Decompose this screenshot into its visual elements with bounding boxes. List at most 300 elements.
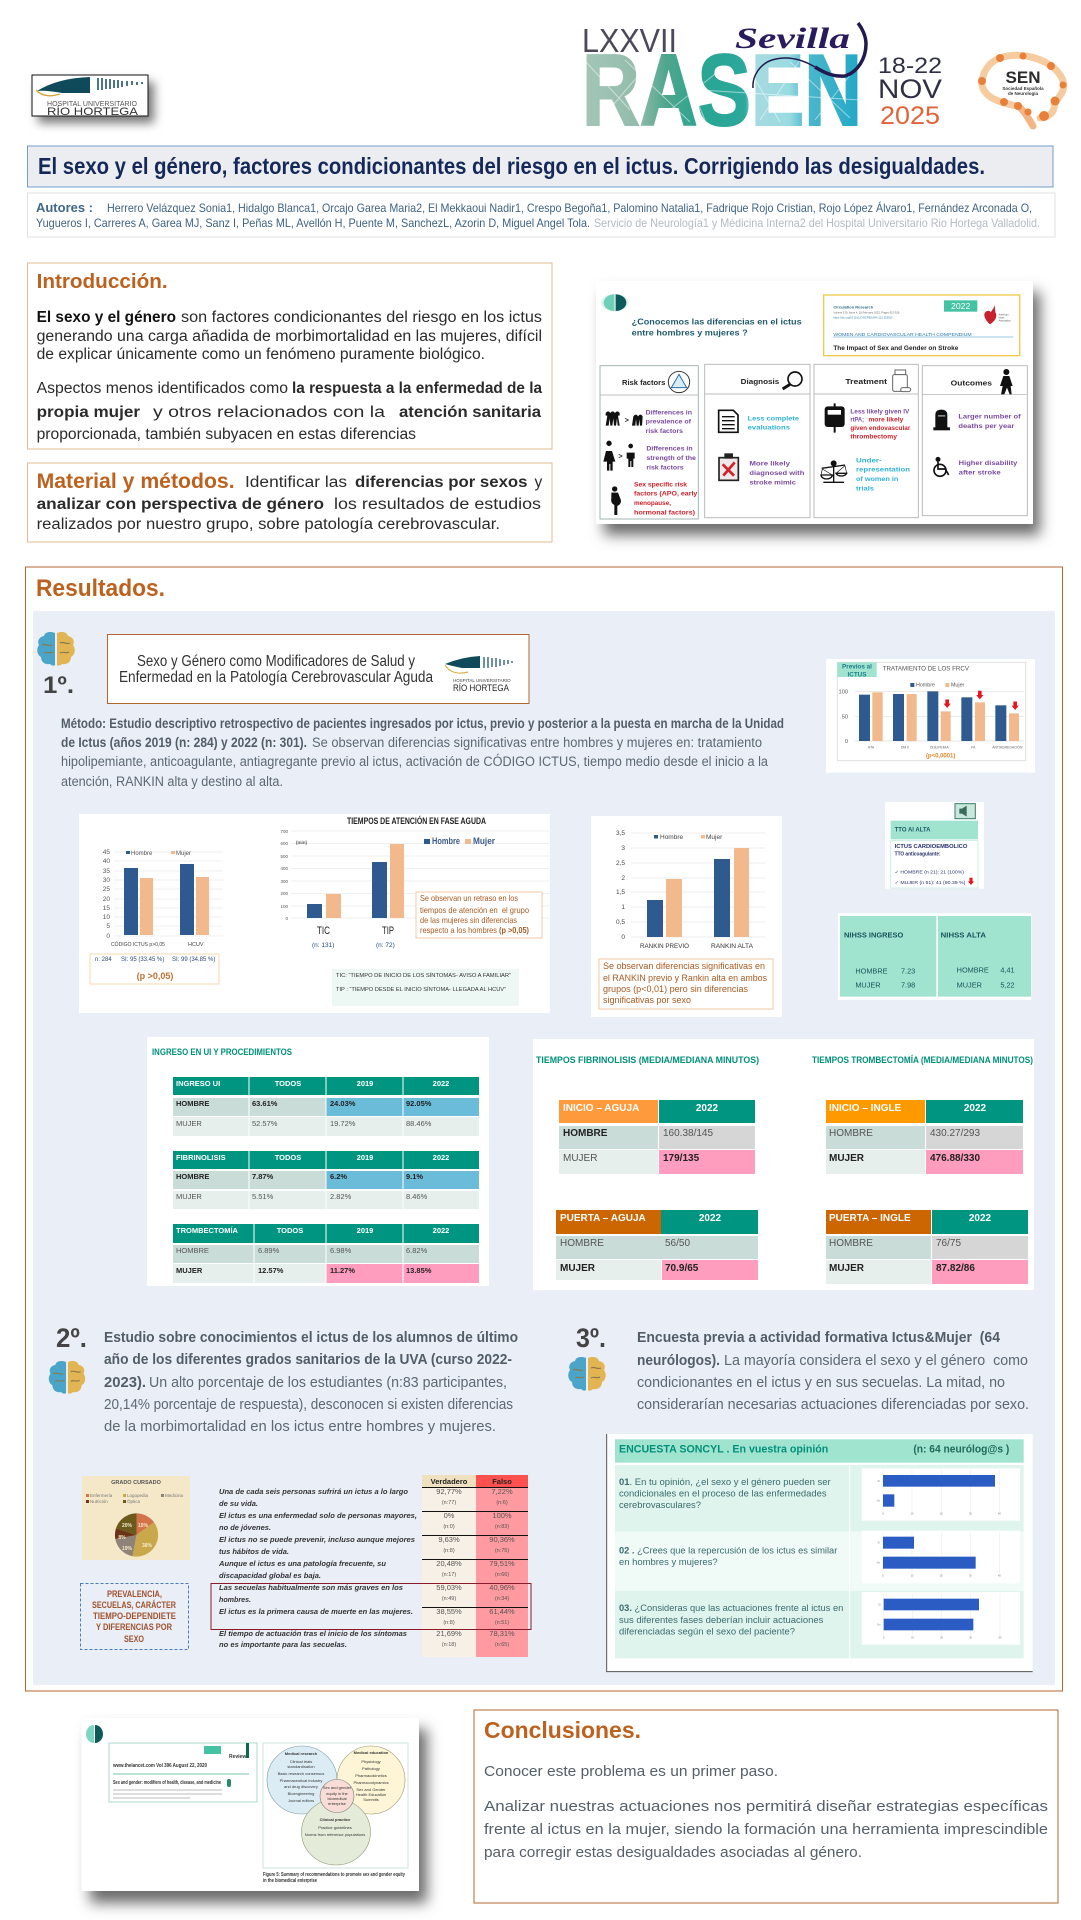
chart: tiempos de atención en fase aguda: TIC [317,925,330,937]
chart: grado cursado pie: 19% [122,1546,133,1552]
venn diagram: equity in the [326,1791,349,1796]
text block: método estudio 1: hipolipemiante, anticoagulante, antiagregante previo al ictus, activación de CÓDIGO ICTUS, tiempo medio desde el inicio a la [61,754,768,769]
questions: discapacidad global es baja. [219,1571,321,1580]
text block: introducción: son factores condicionantes del riesgo en los ictus [181,309,542,326]
table: fibrinolisis [173,1151,479,1209]
panel: chart rankin: RANKIN ALTA [711,943,754,950]
column: outcomes: Outcomes [951,381,992,388]
chart: tiempos de atención en fase aguda: 700 [280,829,288,834]
text block: estudio 2: Estudio sobre conocimientos el ictus de los alumnos de último [104,1330,518,1346]
question 2 [619,1545,837,1567]
lancet reference box [109,1743,257,1802]
chart: respuestas bars: No [877,1622,881,1626]
chart: código ictus [90,849,223,984]
panel: encuesta SONCYL: ENCUESTA SONCYL . En vuestra opinión [619,1444,828,1456]
article reference box [824,295,1020,356]
question 3: diferenciadas según el sexo del paciente? [619,1626,795,1636]
icon: pregnant woman [611,486,621,515]
text block: material y métodos: Identificar las [245,474,347,491]
table: inicio ingle [826,1100,1023,1174]
venn diagram [263,1743,408,1884]
logo: SEN [978,52,1066,126]
panel: ingreso en UI y procedimientos: INGRESO EN UI Y PROCEDIMIENTOS [152,1047,292,1058]
table: inicio aguja: 2022 [696,1103,719,1114]
chart: código ictus: 10 [103,914,110,921]
venn diagram: Sex and gender [323,1785,352,1790]
question 2: en hombres y mujeres? [619,1557,718,1567]
icon: magnifier [783,372,802,389]
text block: conclusiones: Analizar nuestras actuaciones nos permitirá diseñar estrategias específicas [484,1798,1048,1815]
chart: código ictus: 5 [106,923,110,930]
panel: chart rankin: 0 [621,934,625,941]
chart: respuestas bars: 30 [969,1511,972,1515]
chart: grado cursado pie [82,1476,190,1560]
column: treatment: given endovascular [850,425,911,432]
chart: código ictus: 30 [103,877,110,884]
chart: código ictus: 20 [103,896,110,903]
table: trombectomía: HOMBRE [176,1246,209,1255]
study 1 header [37,632,529,704]
chart: grado cursado pie: 15% [138,1523,149,1529]
panel: chart rankin: 0,5 [616,919,625,926]
questions: de su vida. [219,1499,258,1508]
figure: Lancet sex and gender [82,1718,427,1903]
values: 7,22% [491,1487,513,1496]
question 2: 02 . ¿Crees que la repercusión de los ictus es similar [619,1545,837,1555]
values: 0% [444,1511,455,1520]
column: risk factors: Differences in [646,409,692,416]
panel: NIHSS: 4,41 [1000,966,1015,975]
chart: código ictus: 25 [103,886,110,893]
text block: introducción: de explicar únicamente como un fenómeno puramente biológico. [37,346,485,363]
venn diagram: Pathology [362,1766,380,1771]
venn diagram: Practice guidelines [318,1825,352,1830]
study 1 title card: HOSPITAL UNIVERSITARIO [453,678,511,683]
panel: tiempos fibrinolisis y trombectomía [533,1039,1034,1290]
text block: estudio 2: 2023). [104,1375,146,1391]
column: diagnosis: More likely [749,461,790,468]
table: puerta ingle: 76/75 [936,1238,961,1249]
table: puerta ingle [826,1210,1028,1284]
question heading [632,316,802,337]
panel: TTO al alta: ✓ HOMBRE (n 21): 21 (100%) [895,869,965,874]
table: fibrinolisis: TODOS [275,1153,301,1162]
chart: tratamiento de los FRCV: FA [971,745,976,749]
chart: tiempos de atención en fase aguda: 200 [280,891,288,896]
logo: LXXVII RASEN Sevilla congress: RASEN [582,35,862,147]
panel: NIHSS: 7.23 [901,966,915,975]
panel: NIHSS: NIHSS INGRESO [844,930,904,939]
text block: material y métodos: diferencias por sexos [355,474,528,491]
chart: tiempos de atención en fase aguda: 0 [285,916,288,921]
article reference box: 2022 [951,301,970,311]
table: fibrinolisis: 2.82% [330,1192,352,1201]
chart: grado cursado pie: Logopedia [127,1493,149,1498]
panel: TTO al alta: ICTUS CARDIOEMBOLICO [895,844,967,850]
table: inicio aguja: 160.38/145 [663,1128,713,1139]
authors: Servicio de Neurología1 y Médicina Interna2 del Hospital Universitario Rio Hortega Valladolid. [594,216,1040,230]
chart: tratamiento de los FRCV: Hombre [916,683,935,689]
table: inicio ingle: 430.27/293 [930,1128,980,1139]
venn diagram: standardisation [287,1764,315,1769]
chart: código ictus: Hombre [131,851,153,857]
chart: código ictus: 35 [103,868,110,875]
text block: método estudio 1: atención, RANKIN alta y destino al alta. [61,774,283,789]
icon: IV bag [825,403,845,433]
chart: grado cursado pie: 20% [122,1523,133,1529]
venn diagram: and drug discovery [284,1784,318,1789]
values: (n:83) [495,1524,509,1530]
chart: respuestas bars: 40 [998,1574,1001,1578]
question 1: 01. En tu opinión, ¿el sexo y el género pueden ser [619,1477,831,1487]
text block: introducción: El sexo y el género [37,309,176,326]
callout: p value: SI: 99 (34.85 %) [172,957,215,963]
panel: TTO al alta: TTO anticoagulante: [895,852,941,858]
question 1: condicionales en el proceso de las enfermedades [619,1489,827,1499]
heading: resultados: Resultados. [36,575,165,602]
table: verdadero falso: Falso [492,1477,512,1486]
column: risk factors: prevalence of [646,419,692,426]
text block: conclusiones: frente al ictus en la mujer, siendo la formación una herramienta imprescindible [484,1821,1048,1838]
table: inicio aguja [559,1100,755,1174]
table: trombectomía: MUJER [176,1266,203,1275]
text block: estudio 3: condicionantes en el ictus y en sus secuelas. La mitad, no [637,1375,1005,1391]
table: puerta ingle: PUERTA – INGLE [829,1213,911,1224]
column: treatment: Treatment [845,379,888,386]
chart: respuestas bars: No [877,1561,881,1565]
table: ingreso UI: TODOS [275,1079,301,1088]
study 3 header [568,1323,1029,1413]
chart: tiempos de atención en fase aguda: 500 [280,854,288,859]
values [436,1487,515,1648]
callout: retraso atención [416,892,542,938]
values: 59,03% [436,1583,462,1592]
text block: estudio 3: La mayoría considera el sexo y el género como [724,1353,1028,1369]
text block: introducción: Aspectos menos identificados como [37,380,288,397]
icon: pill bottle [893,370,911,392]
questions: El ictus es la primera causa de muerte en las mujeres. [219,1607,413,1616]
chart: grado cursado pie: 8% [118,1535,126,1541]
values: 21,69% [436,1629,462,1638]
text block: material y métodos: realizados por nuestro grupo, sobre patología cerebrovascular. [37,516,500,533]
text block: estudio 2: de la morbimortalidad en los ictus entre hombres y mujeres. [104,1419,496,1435]
question heading: ¿Conocemos las diferencias en el ictus [632,316,802,326]
panel: NIHSS: MUJER [855,981,881,990]
chart: código ictus: CÓDIGO ICTUS p>0,05 [111,941,165,948]
callout: prevalencia, secuelas [80,1584,188,1650]
chart: respuestas bars: 10 [911,1574,914,1578]
panel: NIHSS: 5,22 [1000,980,1015,989]
panel: chart rankin: 2 [621,875,625,882]
panel: tiempos fibrinolisis y trombectomía: TIEMPOS TROMBECTOMÍA (MEDIA/MEDIANA MINUTOS) [812,1055,1033,1066]
table: trombectomía: 11.27% [330,1266,355,1275]
icon: clipboard with cross [719,453,738,480]
column: risk factors: strength of the [646,455,696,462]
column: treatment: representation [856,467,910,474]
values: 78,31% [489,1629,515,1638]
panel: NIHSS: HOMBRE [957,966,989,975]
chart: tratamiento de los FRCV: (p<0,0001) [926,753,955,759]
column: diagnosis: evaluations [748,425,790,432]
table: puerta ingle: HOMBRE [829,1238,873,1249]
question 3 [619,1603,843,1636]
panel: TTO al alta [885,802,984,889]
chart: tratamiento de los FRCV: ANTIAGREGACIÓN [992,744,1023,749]
chart: tratamiento de los FRCV: TRATAMIENTO DE LOS FRCV [883,666,970,673]
article reference box: WOMEN AND CARDIOVASCULAR HEALTH COMPENDIUM [833,332,972,338]
callout: p value [90,954,219,984]
icon: warning [668,371,690,393]
venn diagram: Pharmacokinetics [355,1773,387,1778]
table: ingreso UI: HOMBRE [176,1099,209,1108]
chart: tiempos de atención en fase aguda: 300 [280,879,288,884]
chart: respuestas bars: Sí [878,1602,881,1606]
callout: p value: SI: 95 (33.45 %) [121,957,164,963]
title banner: El sexo y el género, factores condicionantes del riesgo en el ictus. Corrigiendo las desigualdades. [38,153,985,179]
venn diagram: Medical education [354,1750,389,1755]
panel: introducción [28,263,552,449]
authors: Autores : [36,201,93,215]
heading: introducción: Introducción. [37,271,168,293]
panel: TTO al alta: TTO AI ALTA [895,828,931,834]
column: treatment: of women in [856,476,898,483]
text block: método estudio 1: de Ictus (años 2019 (n: 284) y 2022 (n: 301). [61,735,307,750]
panel: chart rankin: Mujer [706,834,723,841]
text block: material y métodos: y [534,474,542,491]
article reference box: Heart [999,317,1005,320]
logo: SEN: Sociedad Española [1002,86,1044,91]
panel: conclusiones [474,1710,1058,1903]
chart: grado cursado pie: Nutrición [90,1499,108,1504]
values: (n:17) [442,1572,456,1578]
questions: no de jóvenes. [219,1523,271,1532]
chart: respuestas bars: 20 [940,1574,943,1578]
text block: estudio 2 [104,1330,518,1435]
table: inicio aguja: INICIO – AGUJA [563,1103,639,1114]
questions: El ictus es una enfermedad solo de personas mayores, [219,1511,417,1520]
logo: LXXVII RASEN Sevilla congress: LXXVII [582,22,677,59]
column: risk factors: risk factors [646,464,684,471]
questions: El ictus no se puede prevenir, incluso aunque mejores [219,1535,415,1544]
icon: woman [1000,369,1013,394]
callout: prevalencia, secuelas: TIEMPO-DEPENDIETE [93,1611,176,1622]
table: ingreso UI: 2019 [357,1079,373,1088]
chart: tiempos de atención en fase aguda: (min) [296,840,307,845]
question 1 [619,1477,831,1510]
title banner [28,146,1053,187]
table: fibrinolisis: FIBRINOLISIS [176,1153,226,1162]
values: 100% [492,1511,512,1520]
column: treatment: more likely [868,417,904,424]
table: ingreso UI: 19.72% [330,1119,356,1128]
icon: woman greater than man [603,441,635,471]
table: trombectomía [173,1224,479,1283]
column: diagnosis [705,364,810,518]
callout: rankin: el RANKIN previo y Rankin alta en ambos [603,973,767,983]
table: inicio aguja: HOMBRE [563,1128,608,1139]
table: ingreso UI: 92.05% [406,1099,432,1108]
table: inicio ingle: HOMBRE [829,1128,873,1139]
legend: TIC TIP definitions: TIP : “TIEMPO DESDE EL INICIO SÍNTOMA- LLEGADA AL HCUV” [336,986,506,993]
chart: respuestas bars: No [877,1498,881,1502]
panel: chart rankin: 1 [621,904,625,911]
callout: rankin: significativas por sexo [603,995,691,1005]
chart: código ictus: Mujer [176,851,191,857]
values: (n:34) [495,1596,509,1602]
values: 20,48% [436,1559,462,1568]
table: fibrinolisis: HOMBRE [176,1172,209,1181]
text block: material y métodos: analizar con perspectiva de género [37,496,324,513]
text block: conclusiones: Conocer este problema es un primer paso. [484,1763,778,1780]
icon: scales [821,461,847,482]
text block: estudio 2: Un alto porcentaje de los estudiantes (n:83 participantes, [149,1375,507,1391]
chart: tratamiento de los FRCV: 100 [839,690,848,696]
chart: grado cursado pie: Óptica [127,1498,141,1504]
table: inicio ingle: 476.88/330 [930,1153,980,1164]
study 2 header [49,1323,518,1435]
text block: método estudio 1 [61,716,784,789]
questions: hombres. [219,1595,251,1604]
chart: tratamiento de los FRCV: DISLIPEMIA [930,745,949,749]
venn diagram: Health Education [356,1792,386,1797]
chart: tiempos de atención en fase aguda: TIP [382,925,394,937]
article reference box: https://doi.org/10.1161/CIRCRESAHA.121.319915 [833,315,893,319]
text block: material y métodos: los resultados de estudios [334,496,541,513]
chart: grado cursado pie: Medicina [165,1493,184,1498]
text block: introducción: y otros relacionados con la [153,404,385,421]
column: risk factors: > [618,451,623,460]
table: trombectomía: 2019 [357,1226,373,1235]
chart: respuestas bars: 10 [911,1511,914,1515]
panel: tiempos fibrinolisis y trombectomía: TIEMPOS FIBRINOLISIS (MEDIA/MEDIANA MINUTOS) [536,1055,759,1066]
venn diagram: Clinical practice [320,1817,351,1822]
chart: tratamiento de los FRCV [826,659,1035,773]
chart: tratamiento de los FRCV: 0 [845,739,848,745]
column: risk factors: factors (APO, early [634,491,698,498]
questions: Las secuelas habitualmente son más graves en los [219,1583,403,1592]
questions: Una de cada seis personas sufrirá un ictus a lo largo [219,1487,408,1496]
callout: rankin: grupos (p<0,01) pero sin diferencias [603,984,748,994]
icon: brain [49,1361,85,1394]
logo: LXXVII RASEN Sevilla congress: 2025 [880,102,940,130]
study 1 title card: RÍO HORTEGA [453,683,509,693]
chart: código ictus: 15 [103,905,110,912]
values: 92,77% [436,1487,462,1496]
logo: SEN: SEN [1006,68,1040,87]
callout: prevalencia, secuelas: SEXO [124,1634,144,1645]
values: (n:49) [442,1596,456,1602]
panel: encuesta SONCYL: (n: 64 neurólog@s ) [913,1444,1010,1456]
table: puerta aguja: 56/50 [665,1238,690,1249]
table: trombectomía: TROMBECTOMÍA [176,1226,239,1235]
text block: material y métodos [37,474,542,533]
values: (n:8) [443,1548,455,1554]
values: (n:0) [443,1524,455,1530]
column: treatment: rtPA; [850,417,864,424]
logo: LXXVII RASEN Sevilla congress: 18-22 [878,53,942,78]
table: fibrinolisis: 9.1% [406,1172,423,1181]
table: fibrinolisis: 6.2% [330,1172,347,1181]
table: ingreso UI: 2022 [433,1079,449,1088]
logo: LXXVII RASEN Sevilla congress: NOV [878,74,942,104]
article reference box: Circulation Research [833,305,874,310]
table: trombectomía: 6.98% [330,1246,352,1255]
column: risk factors: Risk factors [622,380,665,387]
table: puerta aguja: MUJER [560,1263,596,1274]
panel: NIHSS: 7.98 [901,981,915,990]
callout: retraso atención: de las mujeres sin diferencias [420,915,517,925]
venn diagram: Norms from reference populations [305,1832,365,1837]
column: outcomes: deaths per year [958,423,1015,430]
table: trombectomía: 12.57% [258,1266,284,1275]
table: ingreso UI: INGRESO UI [176,1079,220,1088]
values: (n:75) [495,1548,509,1554]
text block: introducción: generando una carga añadida de morbimortalidad en las mujeres, difícil [37,328,542,345]
table: puerta aguja: 2022 [699,1213,722,1224]
logo: Hospital Universitario Río Hortega [32,75,154,123]
column: diagnosis: diagnosed with [749,470,804,477]
study 1 header: 1º. [43,672,74,699]
panel: chart rankin: 2,5 [616,860,625,867]
callout: prevalencia, secuelas: Y DIFERENCIAS POR [96,1622,172,1633]
chart: respuestas bars: 40 [998,1511,1001,1515]
chart: código ictus: 0 [106,933,110,940]
table: fibrinolisis: 2022 [433,1153,449,1162]
table: fibrinolisis: 5.51% [252,1192,274,1201]
chart: tiempos de atención en fase aguda: (n: 131) [312,942,334,949]
logo: LXXVII RASEN Sevilla congress: Sevilla [735,22,850,55]
figure: stroke sex differences summary [596,281,1040,535]
authors [28,193,1055,237]
panel: chart rankin: 3 [621,845,625,852]
questions: El tiempo de actuación tras el inicio de los síntomas [219,1629,407,1638]
text block: método estudio 1: Se observan diferencias significativas entre hombres y mujeres en: tratamiento [312,735,762,750]
table: puerta ingle: MUJER [829,1263,865,1274]
table: verdadero falso: Verdadero [431,1477,468,1486]
chart: código ictus: 40 [103,858,110,865]
table: fibrinolisis: 2019 [357,1153,373,1162]
table: inicio ingle: INICIO – INGLE [829,1103,902,1114]
values: 9,63% [438,1535,460,1544]
callout: rankin: Se observan diferencias significativas en [603,961,765,971]
panel: código ictus and tiempos de atención [79,814,550,1013]
table: trombectomía: 13.85% [406,1266,432,1275]
table: inicio ingle: MUJER [829,1153,865,1164]
questions: no es importante para las secuelas. [219,1640,347,1649]
chart: tiempos de atención en fase aguda: (n: 72) [376,942,395,949]
callout: p value: n: 284 [95,957,112,963]
study 1 title card: Enfermedad en la Patología Cerebrovascular Aguda [119,669,433,686]
text block: introducción: atención sanitaria [399,404,541,421]
text block: introducción: propia mujer [37,404,140,421]
table: ingreso UI: 88.46% [406,1119,432,1128]
text block: introducción: la respuesta a la enfermedad de la [292,380,542,397]
table: puerta aguja: 70.9/65 [665,1263,699,1274]
chart: tratamiento de los FRCV: ICTUS [847,671,866,678]
column: outcomes: Larger number of [958,414,1022,421]
question heading: entre hombres y mujeres ? [632,327,748,337]
table: puerta aguja: PUERTA – AGUJA [560,1213,646,1224]
venn diagram: Basic research consensus [278,1771,324,1776]
column: diagnosis: Diagnosis [741,379,779,386]
panel: resultados [26,567,1062,1691]
panel: chart rankin: 3,5 [616,830,625,837]
values: (n:51) [495,1620,509,1626]
venn diagram: Clinical trials [290,1759,312,1764]
callout: rankin [599,959,773,1009]
column: diagnosis: Less complete [748,415,799,422]
values: (n:65) [495,1642,509,1648]
